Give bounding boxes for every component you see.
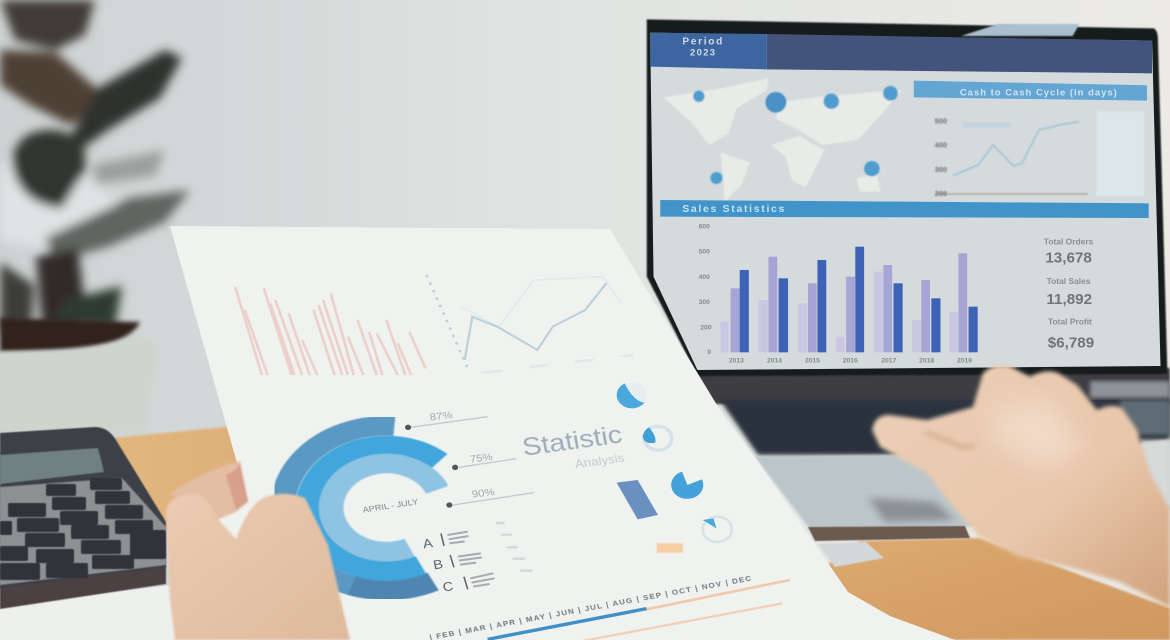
- total orders: Total Orders: [1044, 237, 1094, 247]
- bar chart axis labels: 2016: [843, 358, 858, 365]
- total sales: Total Sales: [1047, 276, 1091, 286]
- pie 3: [671, 472, 703, 499]
- pink bar chart: [235, 287, 426, 375]
- laptop front edge: [808, 526, 970, 541]
- total profit: Total Profit: [1048, 316, 1092, 326]
- map marker: [824, 94, 839, 109]
- callout 90 percent: 90%: [471, 487, 496, 500]
- callout 90 percent: [446, 487, 534, 508]
- right keyboard patch: [1120, 400, 1170, 435]
- legend B: [432, 553, 482, 572]
- callout 87 percent: [405, 410, 488, 430]
- fist: [166, 494, 350, 640]
- bar chart axis labels: [699, 223, 972, 365]
- paper report: [235, 275, 790, 640]
- donut chart: [283, 426, 439, 590]
- calculator keys: [0, 478, 166, 580]
- screen glare: [961, 24, 1079, 36]
- calculator top: [0, 427, 166, 588]
- sales statistics heading bar: [660, 200, 1149, 218]
- analysis subheading: Analysis: [574, 451, 625, 471]
- bar chart axis labels: 300: [699, 299, 710, 306]
- summary statistics: $6,789: [1048, 334, 1094, 351]
- bar chart axis labels: 600: [699, 223, 710, 230]
- line chart: 500: [935, 116, 947, 125]
- bar chart axis labels: 2019: [957, 358, 972, 365]
- legend A: [422, 532, 469, 551]
- potted plant: [0, 0, 190, 330]
- cash cycle heading bar: [914, 81, 1147, 101]
- laptop base: [690, 368, 1170, 567]
- palm rest: [755, 440, 1170, 529]
- orange marker: [657, 543, 683, 553]
- legend B: B: [432, 557, 444, 572]
- wooden desk: [113, 426, 1170, 640]
- calculator: [0, 427, 166, 609]
- map marker: [883, 86, 898, 101]
- month axis labels: | FEB | MAR | APR | MAY | JUN | JUL | AUG | SEP | OCT | NOV | DEC: [429, 574, 753, 640]
- screen: [650, 33, 1161, 370]
- bar chart: [720, 247, 978, 352]
- finger shadow: [925, 432, 975, 448]
- callout 75 percent: [452, 452, 516, 470]
- map marker: [765, 92, 786, 113]
- right hand typing: [872, 365, 1170, 607]
- line chart on paper: [426, 275, 633, 373]
- laptop lid and screen: [647, 19, 1167, 376]
- map marker: [864, 161, 880, 176]
- small pie charts: [617, 382, 732, 542]
- sales statistics heading bar: Sales Statistics: [682, 204, 786, 215]
- finger behind paper: [170, 461, 248, 520]
- note card: [818, 542, 884, 567]
- chart tick labels: [262, 383, 407, 390]
- summary statistics: [1044, 237, 1094, 351]
- callout 75 percent: 75%: [469, 452, 494, 465]
- right hinge highlight: [1090, 381, 1170, 398]
- donut centre label: APRIL - JULY: [362, 497, 419, 514]
- world map: [664, 78, 902, 202]
- blue rectangle marker: [617, 480, 658, 519]
- outer ring lower shade: [352, 581, 433, 590]
- keyboard: [720, 400, 1170, 455]
- calculator key panel: [0, 478, 166, 585]
- legend C: [441, 573, 495, 594]
- statistic heading: Statistic: [520, 420, 624, 462]
- bar chart axis labels: 200: [700, 324, 712, 331]
- fingertip shading: [226, 463, 248, 510]
- flower pot: [0, 335, 158, 434]
- map marker: [710, 172, 722, 184]
- side table: [1096, 112, 1144, 196]
- bar chart axis labels: 0: [707, 349, 711, 356]
- line chart: 200: [935, 189, 947, 198]
- callout 87 percent: 87%: [429, 410, 454, 423]
- bar chart axis labels: 2017: [881, 358, 897, 365]
- year label: 2023: [690, 46, 716, 57]
- faint table values: [496, 522, 532, 572]
- plant soil: [0, 318, 140, 352]
- period label: Period: [682, 37, 724, 48]
- summary statistics: 11,892: [1046, 291, 1092, 308]
- cash cycle heading bar: Cash to Cash Cycle (in days): [960, 86, 1118, 97]
- calculator bottom edge: [0, 565, 166, 609]
- legend C: C: [441, 579, 455, 594]
- summary statistics: 13,678: [1045, 249, 1092, 266]
- hand highlight: [990, 400, 1085, 470]
- map marker: [693, 91, 705, 102]
- trackpad shadow: [868, 498, 955, 522]
- calculator display: [0, 448, 104, 484]
- bar chart axis labels: 2014: [767, 358, 782, 365]
- inner ring: [331, 463, 437, 552]
- outer ring: [283, 426, 433, 590]
- line chart: 400: [935, 140, 947, 149]
- sheet under calculator: [0, 584, 360, 640]
- paper report sheet: [170, 226, 955, 640]
- bar chart axis labels: 2013: [729, 358, 744, 365]
- timeline bars: [488, 580, 790, 640]
- left hand holding paper: [166, 461, 350, 640]
- bar chart axis labels: 400: [699, 274, 710, 281]
- pie 4: [703, 517, 732, 542]
- white gap between fingers: [214, 500, 258, 541]
- middle ring: [308, 445, 439, 571]
- bar chart axis labels: 500: [699, 248, 710, 255]
- bar chart axis labels: 2015: [805, 358, 820, 365]
- line chart: [935, 112, 1144, 198]
- hinge band: [690, 368, 1170, 404]
- right desk patch: [1140, 440, 1170, 510]
- line chart: 300: [935, 165, 947, 174]
- legend A: A: [422, 536, 435, 551]
- pie 2: [643, 426, 672, 450]
- header bar: [650, 33, 1152, 73]
- pie 1: [617, 382, 647, 408]
- bar chart axis labels: 2018: [919, 358, 934, 365]
- lid frame: [647, 19, 1167, 376]
